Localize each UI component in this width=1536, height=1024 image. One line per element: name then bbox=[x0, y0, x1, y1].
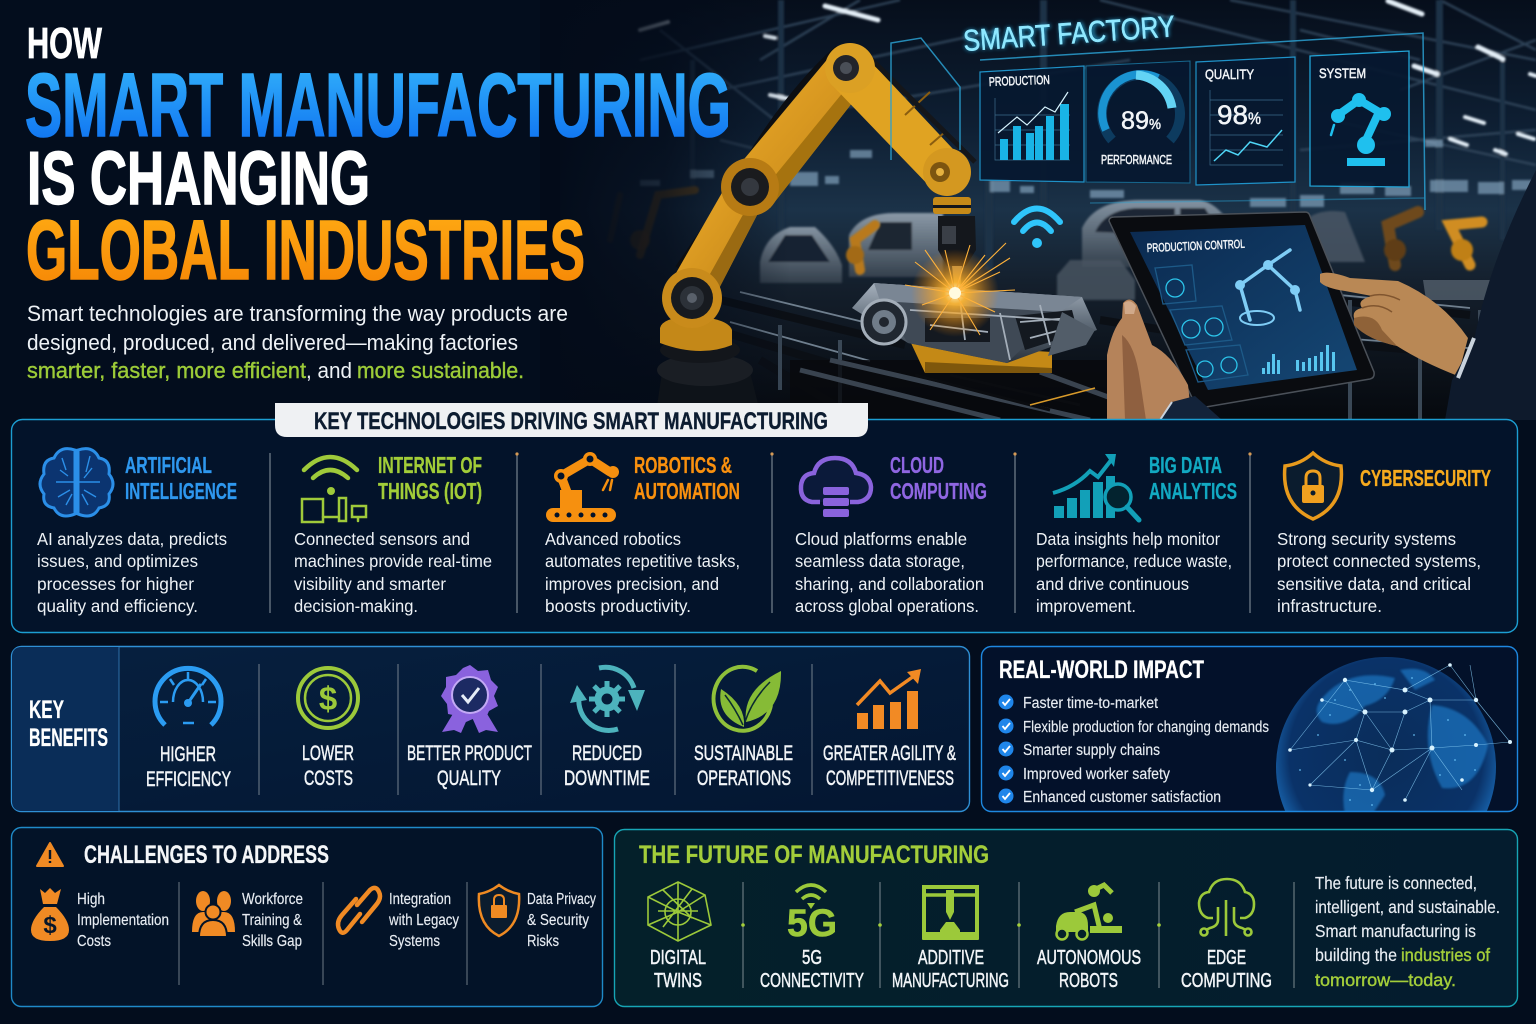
benefit: sustainable operations: SUSTAINABLE bbox=[694, 742, 793, 765]
icon: robot vehicle bbox=[1056, 885, 1122, 940]
icon: robot arm on conveyor bbox=[546, 452, 619, 522]
tech: big data analytics: improvement. bbox=[1036, 596, 1136, 616]
future: additive manufacturing: MANUFACTURING bbox=[892, 970, 1009, 992]
closing statement: intelligent, and sustainable. bbox=[1315, 897, 1500, 917]
background robots bbox=[610, 190, 1482, 270]
tech: robotics and automation bbox=[545, 452, 740, 616]
closing statement: Smart manufacturing is bbox=[1315, 921, 1476, 941]
icon: money bag: $ bbox=[43, 912, 57, 939]
challenge: implementation costs: High bbox=[77, 891, 105, 908]
challenge: workforce training bbox=[192, 891, 303, 950]
tech: cybersecurity: sensitive data, and critical bbox=[1277, 574, 1471, 594]
tech: cloud computing bbox=[795, 452, 987, 616]
future: digital twins: DIGITAL bbox=[650, 947, 706, 969]
intro text: more sustainable. bbox=[357, 358, 524, 383]
heading: key benefits: KEY bbox=[29, 696, 64, 724]
tech: cybersecurity: Strong security systems bbox=[1277, 529, 1456, 549]
benefit: better product quality bbox=[407, 665, 532, 790]
tech: artificial intelligence: AI analyzes data, predicts bbox=[37, 529, 227, 549]
benefit: greater agility: COMPETITIVENESS bbox=[826, 767, 954, 790]
title: GLOBAL INDUSTRIES bbox=[26, 203, 585, 297]
welding sparks bbox=[905, 243, 1015, 337]
icon: dollar coin: $ bbox=[319, 680, 337, 717]
hud panel: performance gauge: PERFORMANCE bbox=[1101, 152, 1172, 167]
future: digital twins bbox=[648, 882, 711, 992]
tech: robotics and automation: Advanced robotics bbox=[545, 529, 681, 549]
title: IS CHANGING bbox=[27, 136, 370, 220]
challenge: implementation costs: Costs bbox=[77, 933, 111, 950]
future: additive manufacturing: ADDITIVE bbox=[918, 947, 984, 969]
intro text: , and bbox=[306, 358, 352, 383]
windows and distant lights bbox=[640, 128, 1536, 207]
icon: shield and lock bbox=[1285, 453, 1341, 519]
tech: big data analytics: ANALYTICS bbox=[1149, 478, 1237, 504]
tech: robotics and automation: ROBOTICS & bbox=[634, 452, 732, 478]
tech: internet of things: THINGS (IOT) bbox=[378, 478, 482, 504]
benefit: reduced downtime bbox=[564, 667, 650, 790]
future: edge computing: COMPUTING bbox=[1181, 970, 1272, 992]
hud panel: quality: 98 bbox=[1217, 100, 1248, 130]
tech: robotics and automation: automates repetitive tasks, bbox=[545, 551, 740, 571]
icon: wireframe cube bbox=[648, 882, 711, 941]
challenge: legacy integration: Systems bbox=[389, 933, 440, 950]
ceiling lights bbox=[640, 1, 1536, 154]
hud frame bbox=[891, 33, 1425, 210]
challenge: workforce training: Workforce bbox=[242, 891, 303, 908]
icon: shield lock bbox=[479, 885, 519, 936]
icon: chart and magnifier bbox=[1053, 454, 1139, 520]
tech: artificial intelligence: quality and efficiency. bbox=[37, 596, 198, 616]
icon: bar chart with arrow bbox=[857, 669, 921, 729]
heading banner: KEY TECHNOLOGIES DRIVING SMART MANUFACTURING bbox=[314, 408, 828, 435]
future: autonomous robots: ROBOTS bbox=[1059, 970, 1118, 992]
future: autonomous robots bbox=[1037, 885, 1141, 992]
benefit: reduced downtime: REDUCED bbox=[572, 742, 642, 765]
benefit: better product quality: QUALITY bbox=[437, 767, 501, 790]
future: edge computing bbox=[1181, 879, 1272, 992]
challenge: implementation costs bbox=[31, 888, 169, 950]
challenge: data privacy: & Security bbox=[527, 912, 589, 929]
future: additive manufacturing bbox=[892, 887, 1009, 992]
hud panel: system bbox=[1310, 51, 1409, 187]
tech: internet of things: INTERNET OF bbox=[378, 452, 482, 478]
tech: cybersecurity: infrastructure. bbox=[1277, 596, 1382, 616]
engine block being welded bbox=[852, 283, 1097, 373]
closing statement: industries of bbox=[1401, 945, 1490, 965]
challenge: data privacy bbox=[479, 885, 596, 950]
challenge: legacy integration: with Legacy bbox=[388, 912, 459, 929]
tech: cloud computing: sharing, and collaboration bbox=[795, 574, 984, 594]
benefit: better product quality: BETTER PRODUCT bbox=[407, 742, 532, 765]
icon: chain link bbox=[338, 888, 380, 933]
tech: robotics and automation: boosts productivity. bbox=[545, 596, 691, 616]
tech: robotics and automation: AUTOMATION bbox=[634, 478, 740, 504]
heading banner bbox=[275, 403, 868, 437]
tech: robotics and automation: improves precision, and bbox=[545, 574, 719, 594]
icon: cloud and servers bbox=[801, 458, 871, 517]
future: 5g connectivity: CONNECTIVITY bbox=[760, 970, 864, 992]
benefit: sustainable operations: OPERATIONS bbox=[697, 767, 791, 790]
benefit: higher efficiency: EFFICIENCY bbox=[146, 768, 231, 791]
hud panel: quality: QUALITY bbox=[1205, 66, 1255, 82]
suit sleeves bbox=[1160, 170, 1536, 420]
globe bbox=[1276, 657, 1512, 811]
intro text: Smart technologies are transforming the way products are bbox=[27, 301, 568, 326]
tech: cloud computing: Cloud platforms enable bbox=[795, 529, 967, 549]
challenge: workforce training: Training & bbox=[242, 912, 302, 929]
tech: big data analytics: Data insights help monitor bbox=[1036, 529, 1220, 549]
challenge: data privacy: Data Privacy bbox=[527, 891, 596, 908]
benefit: higher efficiency bbox=[146, 668, 231, 791]
panel: key technologies bbox=[12, 403, 1518, 632]
heading with warning icon bbox=[37, 841, 329, 869]
checklist: Faster time-to-market bbox=[1023, 695, 1158, 712]
panel: key benefits bbox=[12, 646, 970, 812]
tech: internet of things bbox=[294, 452, 492, 616]
checklist bbox=[998, 694, 1269, 806]
title: SMART MANUFACTURING bbox=[25, 56, 731, 156]
tech: big data analytics: BIG DATA bbox=[1149, 452, 1222, 478]
tech: artificial intelligence: INTELLIGENCE bbox=[125, 478, 237, 504]
hero illustration: smart factory bbox=[540, 0, 1536, 420]
closing statement: building the bbox=[1315, 945, 1397, 965]
intro text: smarter, faster, more efficient bbox=[27, 358, 306, 383]
icon: wifi and devices bbox=[302, 457, 366, 522]
challenge: implementation costs: Implementation bbox=[77, 912, 169, 929]
future: digital twins: TWINS bbox=[654, 970, 702, 992]
tech: cloud computing: across global operations. bbox=[795, 596, 979, 616]
heading: key benefits bbox=[29, 696, 108, 752]
icon: 3d printer bbox=[922, 887, 979, 940]
tech: internet of things: machines provide real-time bbox=[294, 551, 492, 571]
benefit: higher efficiency: HIGHER bbox=[160, 743, 216, 766]
background cars bbox=[760, 200, 1365, 300]
hud panel: production: PRODUCTION bbox=[989, 73, 1050, 89]
closing statement bbox=[1315, 873, 1500, 990]
future: 5g connectivity: 5G bbox=[802, 947, 822, 969]
benefit: lower costs bbox=[298, 668, 358, 790]
hud panel: system: SYSTEM bbox=[1319, 65, 1366, 81]
hands bbox=[1107, 273, 1468, 420]
closing statement: tomorrow—today. bbox=[1315, 970, 1456, 990]
hud panel: performance gauge: % bbox=[1149, 116, 1161, 133]
icon: brain bbox=[40, 449, 113, 516]
tech: artificial intelligence: issues, and optimizes bbox=[37, 551, 198, 571]
intro text bbox=[27, 301, 568, 383]
panel: real-world impact bbox=[980, 646, 1518, 812]
hud panel: production bbox=[980, 66, 1084, 182]
benefit: sustainable operations bbox=[694, 667, 793, 790]
heading: key benefits: BENEFITS bbox=[29, 724, 108, 752]
icon: gear with cycle arrows bbox=[570, 667, 645, 730]
future: 5g connectivity bbox=[760, 885, 864, 992]
hud panel: performance gauge: 89 bbox=[1121, 107, 1149, 135]
intro text: designed, produced, and delivered—making factories bbox=[27, 330, 518, 355]
left fade bbox=[540, 0, 790, 420]
tech: big data analytics: and drive continuous bbox=[1036, 574, 1189, 594]
heading: REAL-WORLD IMPACT bbox=[999, 656, 1204, 684]
tech: cloud computing: CLOUD bbox=[890, 452, 944, 478]
tech: internet of things: visibility and smarter bbox=[294, 574, 446, 594]
heading: THE FUTURE OF MANUFACTURING bbox=[639, 841, 989, 869]
icon: ribbon badge bbox=[441, 665, 498, 733]
tech: internet of things: Connected sensors and bbox=[294, 529, 470, 549]
tech: big data analytics: performance, reduce waste, bbox=[1036, 551, 1232, 571]
hud panel: quality: % bbox=[1248, 109, 1261, 128]
icon: leaf in ring bbox=[714, 667, 781, 731]
benefit: greater agility: GREATER AGILITY & bbox=[823, 742, 956, 765]
conveyors and tables bbox=[700, 285, 1480, 420]
tech: artificial intelligence bbox=[37, 449, 237, 616]
challenge: legacy integration bbox=[338, 888, 459, 950]
tech: artificial intelligence: ARTIFICIAL bbox=[125, 452, 212, 478]
tech: cloud computing: seamless data storage, bbox=[795, 551, 965, 571]
icon: 5G signal: 5G bbox=[787, 902, 837, 945]
checklist: Flexible production for changing demands bbox=[1023, 719, 1269, 736]
future: autonomous robots: AUTONOMOUS bbox=[1037, 947, 1141, 969]
closing statement: The future is connected, bbox=[1315, 873, 1477, 893]
icon: cloud with circuit bbox=[1199, 879, 1254, 936]
benefit: reduced downtime: DOWNTIME bbox=[564, 767, 650, 790]
icon: gauge bbox=[155, 668, 221, 725]
tablet: PRODUCTION CONTROL bbox=[1147, 237, 1245, 255]
benefit: lower costs: COSTS bbox=[304, 767, 353, 790]
tech: internet of things: decision-making. bbox=[294, 596, 418, 616]
hud panel: quality bbox=[1196, 57, 1295, 185]
robotic arm bbox=[655, 43, 976, 420]
panel: challenges bbox=[12, 828, 602, 1006]
title: HOW bbox=[27, 19, 102, 68]
benefit: greater agility bbox=[823, 669, 956, 790]
checklist: Smarter supply chains bbox=[1023, 742, 1160, 759]
tech: big data analytics bbox=[1036, 452, 1237, 616]
challenge: legacy integration: Integration bbox=[389, 891, 451, 908]
icon: people group bbox=[192, 891, 235, 937]
tablet bbox=[1109, 212, 1374, 408]
tech: cybersecurity: protect connected systems, bbox=[1277, 551, 1481, 571]
factory background structure bbox=[640, 0, 1536, 270]
hud title: SMART FACTORY bbox=[962, 10, 1176, 58]
hud panel: performance gauge bbox=[1086, 61, 1190, 183]
challenge: data privacy: Risks bbox=[527, 933, 559, 950]
heading with warning icon: CHALLENGES TO ADDRESS bbox=[84, 841, 329, 869]
tech: artificial intelligence: processes for higher bbox=[37, 574, 194, 594]
icon: wifi signal bbox=[1014, 208, 1060, 248]
title bbox=[25, 19, 731, 297]
benefit: lower costs: LOWER bbox=[302, 742, 354, 765]
hud title: SMART FACTORY bbox=[962, 10, 1176, 58]
future: edge computing: EDGE bbox=[1207, 947, 1246, 969]
tech: cloud computing: COMPUTING bbox=[890, 478, 987, 504]
checklist: Improved worker safety bbox=[1023, 766, 1170, 783]
panel: future of manufacturing bbox=[614, 830, 1518, 1006]
challenge: workforce training: Skills Gap bbox=[242, 933, 302, 950]
checklist: Enhanced customer satisfaction bbox=[1023, 789, 1221, 806]
tech: cybersecurity bbox=[1277, 453, 1491, 616]
